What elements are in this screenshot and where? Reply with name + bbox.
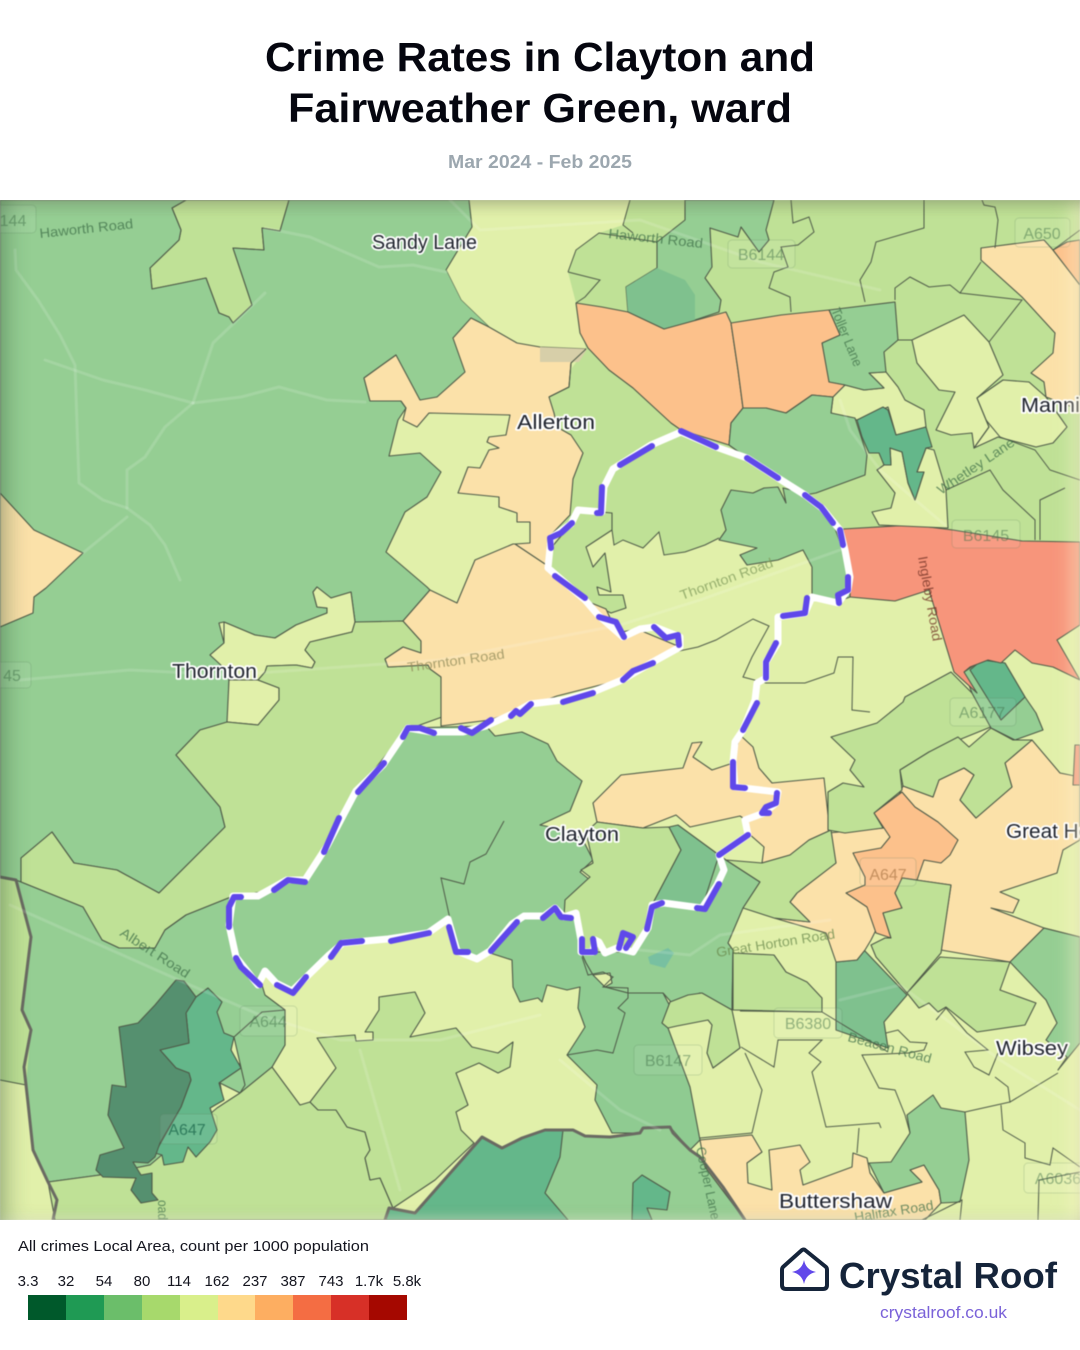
- website url: crystalroof.co.uk: [880, 1304, 1008, 1322]
- road name labels: [39, 216, 1017, 1225]
- road number shields: B6380: [785, 1016, 831, 1033]
- thin cell boundaries: [0, 200, 1080, 1220]
- legend tick labels: 32: [58, 1273, 74, 1290]
- road number shields: B6145: [963, 528, 1009, 545]
- legend tick labels: 3.3: [18, 1273, 38, 1290]
- road number shields: [0, 205, 1080, 1193]
- title: [265, 34, 815, 131]
- road name labels: Toller Lane: [828, 306, 865, 369]
- date range subtitle: Mar 2024 - Feb 2025: [448, 152, 632, 172]
- road number shields: A647: [168, 1122, 206, 1139]
- road name labels: Great Horton Road: [715, 926, 836, 960]
- road number shields: 144: [0, 213, 26, 230]
- faint roads: [10, 200, 1080, 1190]
- legend tick labels: 80: [134, 1273, 150, 1290]
- road number shields: A644: [249, 1014, 287, 1031]
- legend tick labels: 5.8k: [393, 1273, 422, 1290]
- road name labels: Thornton Road: [678, 555, 775, 603]
- title: Fairweather Green, ward: [288, 85, 792, 131]
- legend tick labels: 162: [204, 1273, 230, 1290]
- map edge vignette: [0, 200, 1080, 1220]
- road number shields: B6144: [738, 247, 784, 264]
- icon: house with star: [782, 1250, 827, 1289]
- legend: [18, 1238, 422, 1320]
- legend tick labels: 387: [280, 1273, 306, 1290]
- road number shields: B6147: [645, 1053, 691, 1070]
- road name labels: Whetley Lane: [934, 435, 1017, 497]
- legend tick labels: 237: [242, 1273, 268, 1290]
- road number shields: 45: [3, 668, 21, 685]
- place name labels: [172, 232, 1080, 1213]
- road name labels: Haworth Road: [608, 226, 704, 251]
- purple dashes: [229, 431, 848, 993]
- white boundary outline: [229, 432, 850, 991]
- road name labels: Ingleby Road: [915, 555, 945, 642]
- road name labels: Thornton Road: [406, 646, 505, 675]
- legend tick labels: 114: [167, 1273, 191, 1290]
- legend tick labels: [18, 1273, 422, 1290]
- road number shields: A647: [869, 867, 907, 884]
- choropleth map: [0, 200, 1080, 1220]
- logo: Crystal Roof: [780, 1248, 1058, 1322]
- road name labels: Albert Road: [117, 925, 193, 981]
- title: Crime Rates in Clayton and: [265, 34, 815, 80]
- place name labels: Sandy Lane: [372, 232, 477, 254]
- place name labels: Wibsey: [996, 1038, 1068, 1060]
- road name labels: Beacon Road: [846, 1029, 933, 1066]
- road number shields: A6177: [959, 705, 1005, 722]
- legend tick labels: 1.7k: [355, 1273, 384, 1290]
- road name labels: Haworth Road: [39, 216, 134, 241]
- road number shields: A650: [1023, 226, 1061, 243]
- legend tick labels: 54: [96, 1273, 112, 1290]
- title and date: [265, 34, 815, 172]
- place name labels: Thornton: [172, 661, 257, 683]
- legend tick labels: 743: [318, 1273, 344, 1290]
- place name labels: Buttershaw: [779, 1191, 893, 1213]
- crime rate regions: [0, 200, 1080, 1220]
- legend title: All crimes Local Area, count per 1000 population: [18, 1238, 369, 1255]
- ward county boundary: [0, 877, 745, 1220]
- legend colour scale: [28, 1295, 407, 1320]
- place name labels: Allerton: [517, 412, 595, 434]
- place name labels: Clayton: [545, 824, 619, 846]
- logo wordmark: Crystal Roof: [839, 1255, 1058, 1296]
- ward boundary: [229, 431, 850, 993]
- road number shields: A6036: [1035, 1171, 1080, 1188]
- background base: [0, 200, 1080, 1220]
